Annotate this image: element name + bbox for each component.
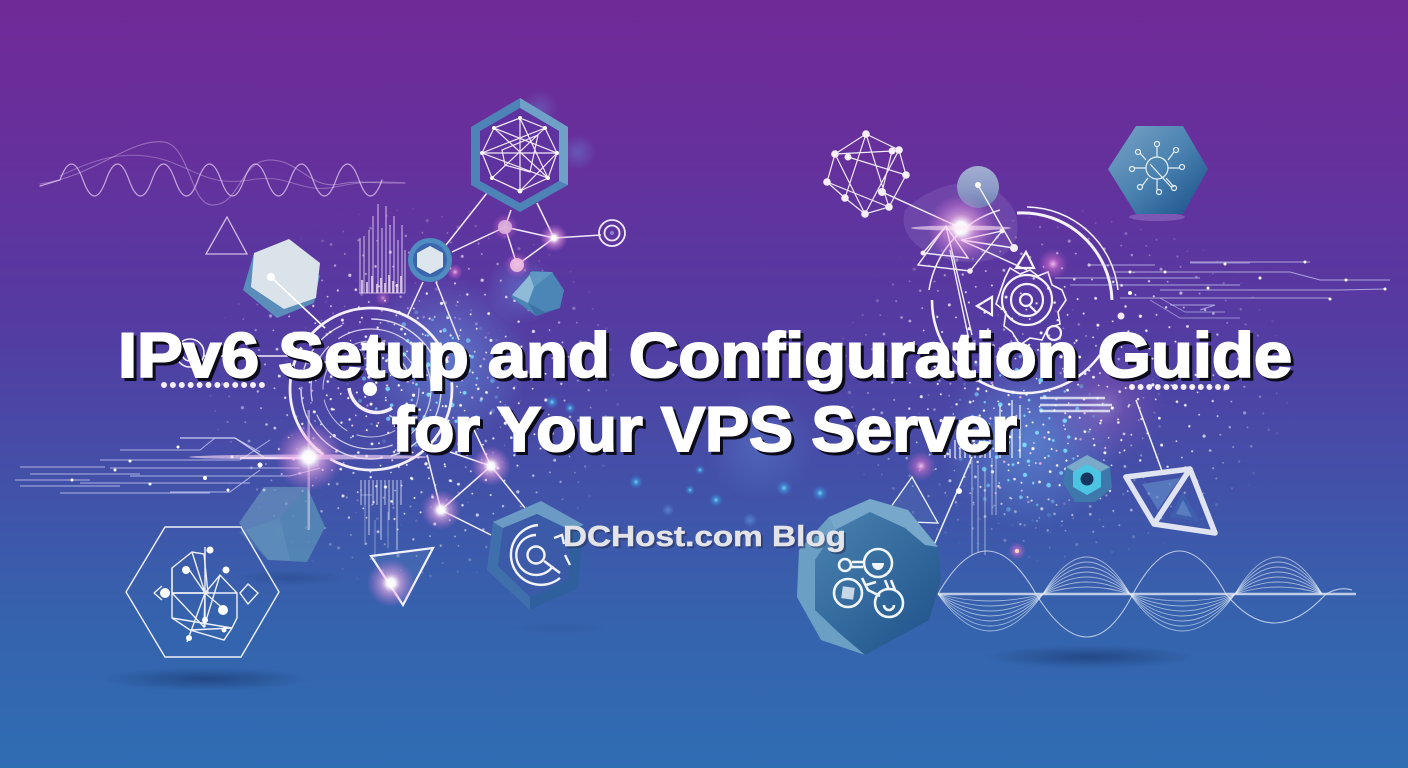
hexagon with radar icon [487, 501, 584, 610]
blue polyhedron [511, 271, 564, 316]
translucent polyhedron lower left [239, 487, 325, 562]
connector lines lower centre [427, 417, 525, 535]
glowing nodes lower centre [421, 446, 511, 530]
circuit traces right [1055, 262, 1390, 318]
circuit trace dots left [70, 446, 266, 492]
server traces under ring [934, 398, 1112, 555]
connector nodes at flare [920, 228, 1018, 274]
circuit bars upper left [359, 204, 405, 293]
pink nodes [375, 214, 568, 306]
subtitle: DCHost.com Blog [563, 521, 846, 553]
gear radar icon [977, 252, 1066, 345]
double triangle icon [1126, 469, 1215, 533]
translucent blob and sphere [904, 166, 1018, 262]
ring node with light centre [408, 238, 452, 282]
hexagon with virus icon upper right [1108, 126, 1208, 221]
triangle with pink glow [367, 548, 433, 607]
triangle outline lower right [881, 477, 938, 523]
circuit bars lower left [361, 480, 401, 560]
particle field left [210, 94, 620, 579]
target ring icon [599, 220, 625, 246]
central blue light dots [545, 390, 828, 527]
triangle outline upper left [206, 217, 247, 254]
circuit traces left [15, 438, 320, 493]
radial target circle left [290, 308, 452, 470]
main title [118, 321, 1292, 465]
particle field right [820, 205, 1300, 565]
large faceted sphere with icon [797, 499, 941, 655]
network connector lines upper left [407, 193, 601, 340]
hexagon with network icon [471, 98, 568, 212]
circuit trace dots right [1128, 260, 1386, 300]
dotted row right [1132, 384, 1227, 390]
triangular connector lines at flare [882, 185, 1027, 340]
polygon network upper right [823, 130, 910, 218]
waveform top left [40, 142, 405, 205]
sine waves lower right [938, 551, 1356, 637]
big circular ring right [929, 207, 1118, 393]
flare right [911, 194, 1124, 320]
light hexagon [243, 239, 325, 328]
main title: IPv6 Setup and Configuration Guide [118, 321, 1292, 391]
pink sparks lower right [906, 451, 1026, 560]
hexagon outline with network icon [126, 527, 279, 657]
main title: for Your VPS Server [392, 395, 1017, 465]
lens flare left [189, 410, 429, 530]
network icon nodes [160, 546, 230, 641]
lower right connector line [1136, 400, 1162, 471]
dotted row left [164, 382, 270, 388]
soft floor shadows [102, 570, 1195, 691]
small ring with connector at left [176, 339, 292, 367]
hex nut icon [1063, 455, 1112, 502]
